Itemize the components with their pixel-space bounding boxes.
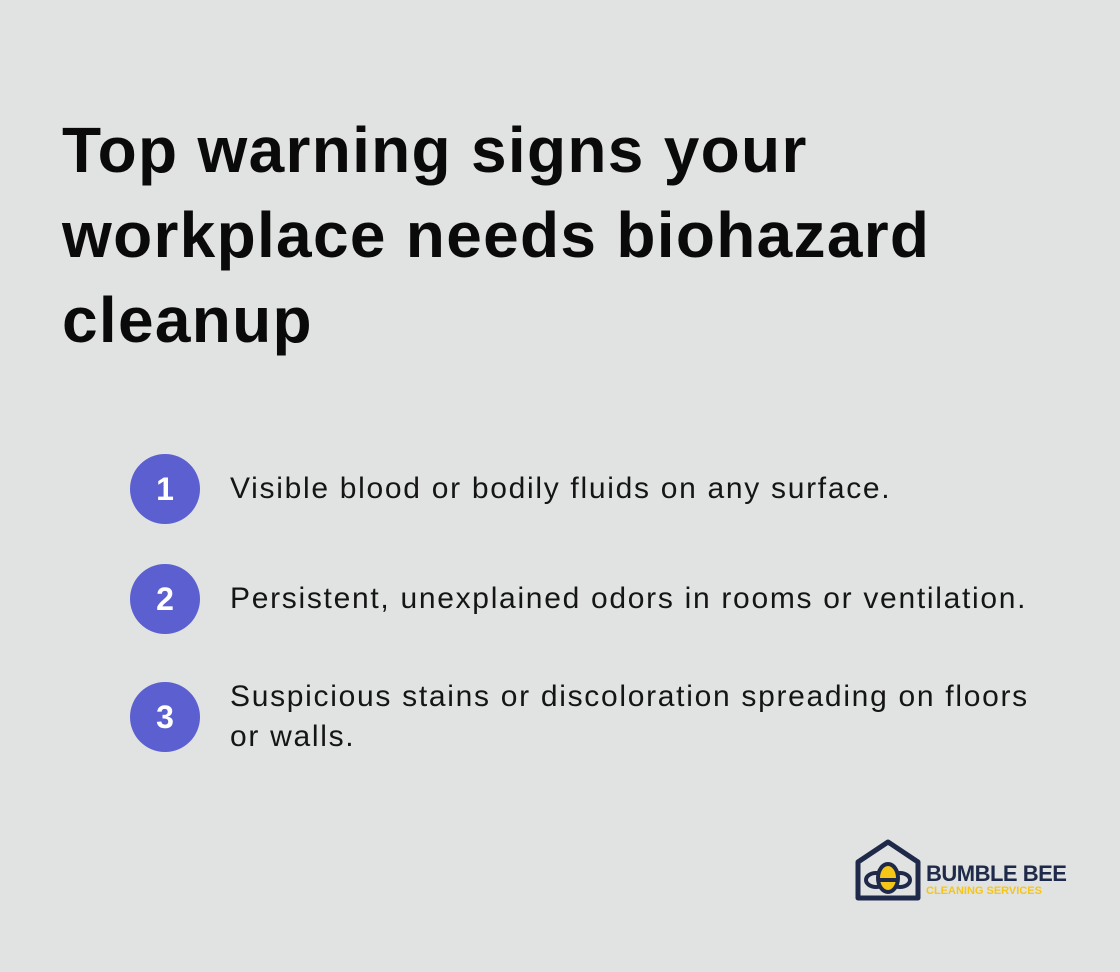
text 3: or walls. xyxy=(230,720,355,753)
title: Top warning signs your xyxy=(62,114,808,186)
number 2: 2 xyxy=(156,581,174,617)
text 2: Persistent, unexplained odors in rooms or ventilation. xyxy=(230,582,1027,615)
text 3: Suspicious stains or discoloration spreading on floors xyxy=(230,680,1029,713)
logo text xyxy=(926,861,1066,897)
item 2 xyxy=(130,564,1027,634)
item 3 xyxy=(130,680,1029,753)
text 3 xyxy=(230,680,1029,753)
item 1 xyxy=(130,454,891,524)
logo text: CLEANING SERVICES xyxy=(926,885,1042,897)
logo xyxy=(856,840,1066,900)
title: cleanup xyxy=(62,284,313,356)
number 2 xyxy=(130,564,200,634)
title xyxy=(62,114,930,356)
number 1 xyxy=(130,454,200,524)
number 3 xyxy=(130,682,200,752)
number 3: 3 xyxy=(156,699,174,735)
number 1: 1 xyxy=(156,471,174,507)
title: workplace needs biohazard xyxy=(62,199,930,271)
logo text: BUMBLE BEE xyxy=(926,861,1066,886)
text 1: Visible blood or bodily fluids on any surface. xyxy=(230,472,891,505)
icon: bee house xyxy=(856,840,920,900)
